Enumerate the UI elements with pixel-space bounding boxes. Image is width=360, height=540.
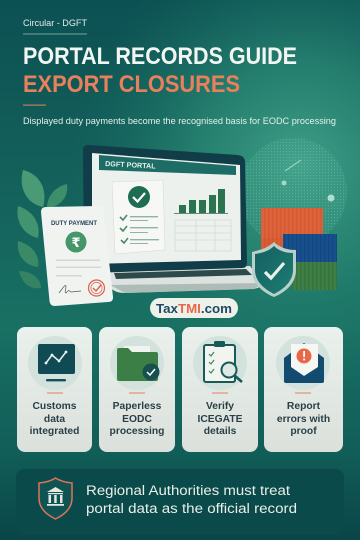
card label: integrated [30, 426, 79, 437]
card label: ICEGATE [197, 414, 243, 425]
laptop screen [92, 153, 241, 264]
card label [197, 401, 243, 437]
card label: processing [110, 426, 164, 437]
card label [110, 401, 164, 437]
shipping containers [261, 208, 337, 290]
signature [59, 285, 81, 293]
title: EXPORT CLOSURES [23, 71, 240, 98]
card label: details [204, 426, 237, 437]
portal header bar [99, 155, 236, 175]
card label [30, 401, 79, 437]
bar chart [174, 189, 228, 214]
callout text [86, 483, 297, 517]
icon: approval stamp [88, 280, 104, 296]
card: customs data [17, 327, 92, 452]
card: verify icegate [182, 327, 258, 452]
duty payment heading: DUTY PAYMENT [51, 220, 97, 227]
subtitle: Displayed duty payments become the recognised basis for EODC processing [23, 116, 336, 127]
icon: institution shield [39, 478, 72, 519]
card label: errors with [277, 414, 330, 425]
eyebrow label: Circular - DGFT [23, 18, 87, 28]
icon: rupee coin: ₹ [71, 236, 81, 251]
laptop base [108, 266, 262, 293]
duty payment card [41, 206, 113, 306]
checklist panel [112, 180, 165, 254]
brand pill: TaxTMI.com [156, 301, 232, 316]
icon: clipboard and magnifier [204, 341, 242, 382]
brand pill [150, 298, 238, 318]
title: PORTAL RECORDS GUIDE [23, 43, 297, 70]
card label: Paperless [113, 401, 162, 412]
card label: proof [290, 426, 317, 437]
callout text: portal data as the official record [86, 501, 297, 517]
card: paperless processing [99, 327, 175, 452]
icon: security shield [252, 242, 296, 297]
laptop screen bezel [83, 145, 247, 273]
callout panel [16, 469, 344, 535]
card label: Customs [32, 401, 77, 412]
card label [277, 401, 330, 437]
leaves [17, 170, 67, 288]
laptop [83, 145, 262, 293]
card: report errors [264, 327, 343, 452]
data table [175, 220, 231, 251]
globe [239, 138, 347, 246]
title [23, 43, 297, 98]
callout text: Regional Authorities must treat [86, 483, 290, 499]
icon: monitor chart [38, 344, 75, 381]
icon: envelope with alert [284, 343, 324, 383]
icon: folder [117, 346, 160, 381]
card label: EODC [122, 414, 152, 425]
card label: data [44, 414, 65, 425]
card label: Verify [206, 401, 234, 412]
portal header bar: DGFT PORTAL [105, 159, 156, 171]
card label: Report [287, 401, 321, 412]
